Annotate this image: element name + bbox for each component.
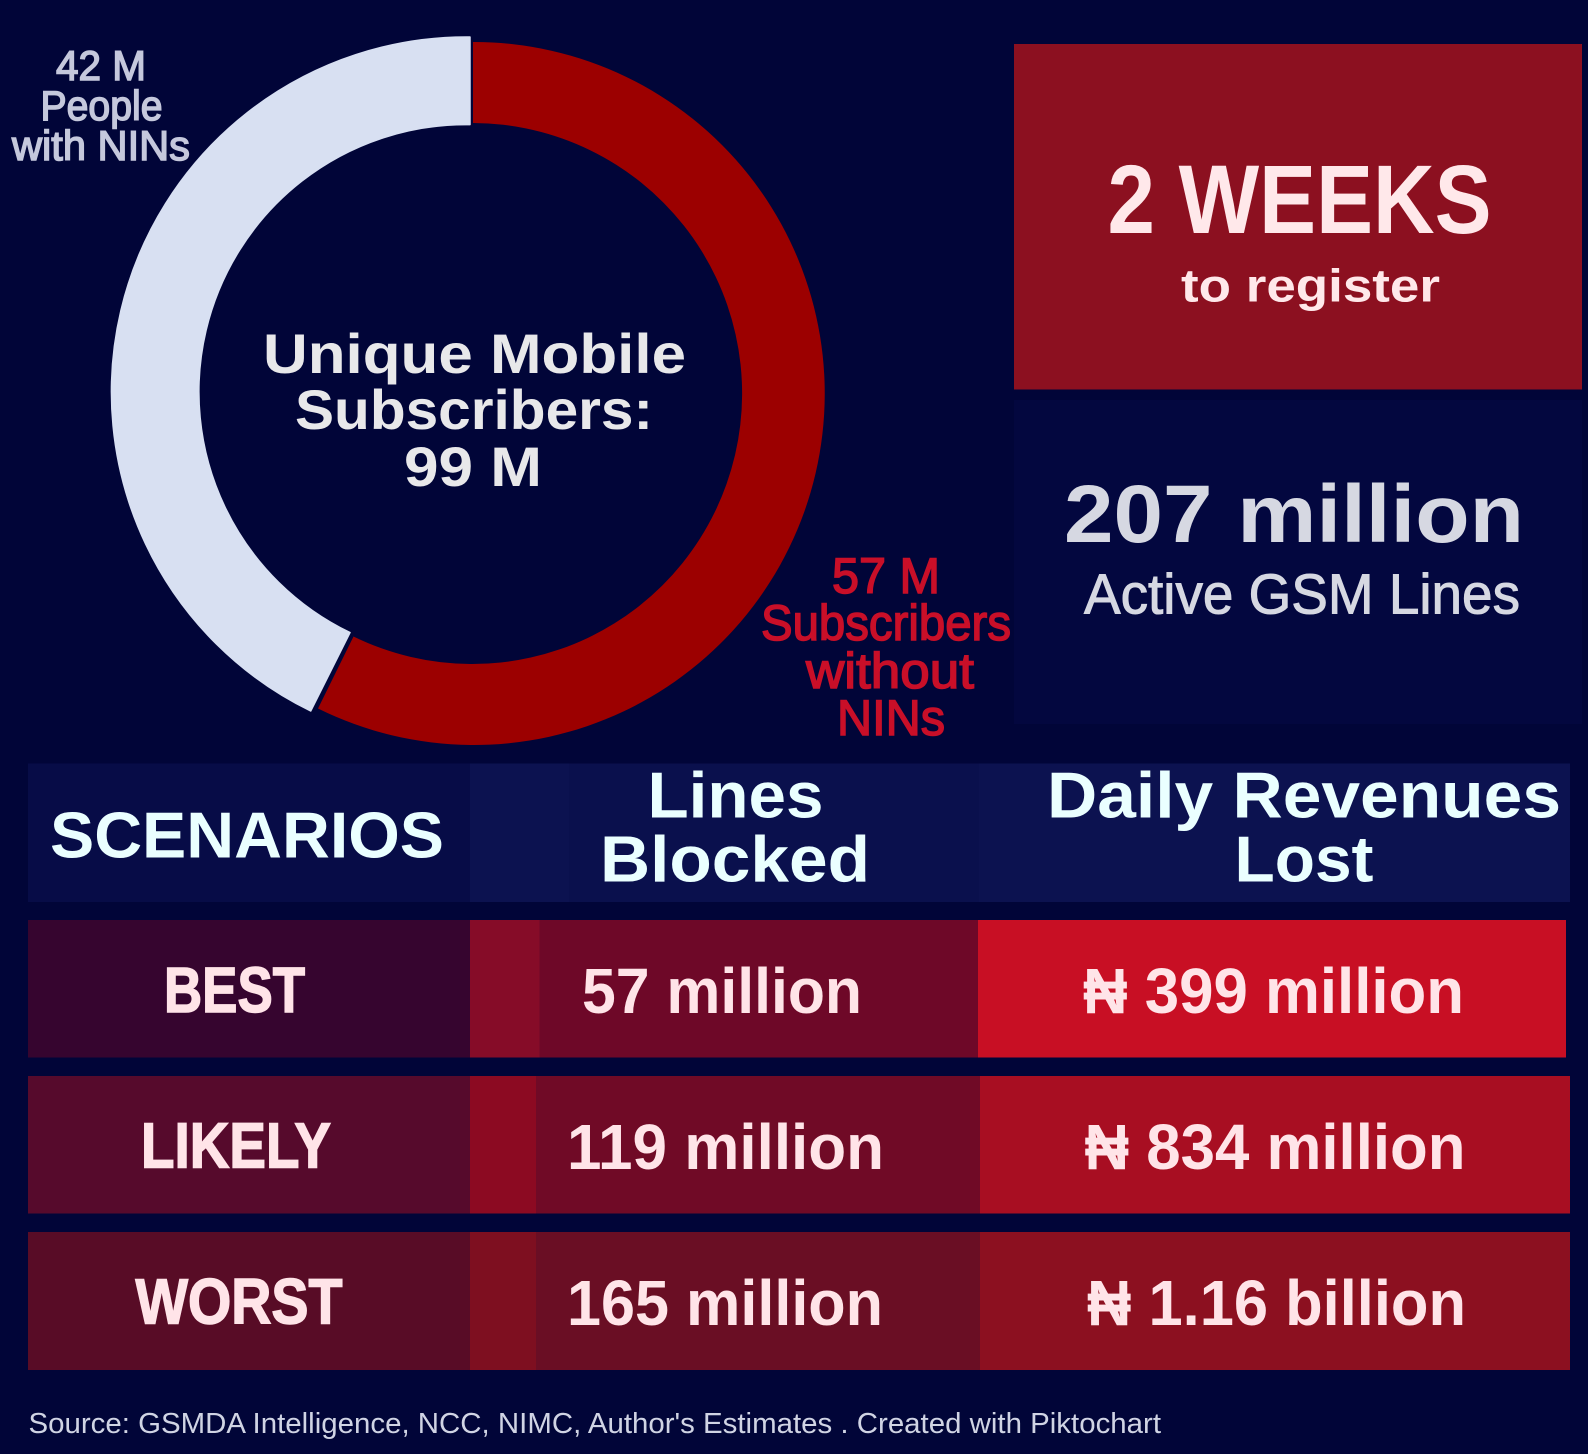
table row: best bbox=[28, 920, 1566, 1058]
column heading: lines blocked: Blocked bbox=[600, 822, 870, 896]
lines blocked: 57 million: 57 million bbox=[582, 955, 862, 1027]
column heading: daily revenues lost bbox=[1047, 758, 1561, 896]
scenario: best: BEST bbox=[164, 954, 305, 1026]
source note: Source: GSMDA Intelligence, NCC, NIMC, Author's Estimates . Created with Piktochart bbox=[28, 1408, 1161, 1440]
label: 57 M subscribers without NINs: Subscribers bbox=[761, 595, 1011, 651]
donut centre label bbox=[263, 322, 686, 498]
table header row bbox=[28, 758, 1570, 902]
column heading: daily revenues lost: Lost bbox=[1234, 822, 1374, 896]
lines blocked: 119 million: 119 million bbox=[567, 1111, 884, 1183]
table row: likely bbox=[28, 1076, 1570, 1214]
column heading: lines blocked: Lines bbox=[648, 758, 824, 832]
label: 57 M subscribers without NINs: NINs bbox=[837, 690, 945, 746]
label: 42 M people with NINs: People bbox=[40, 82, 162, 129]
revenue lost: 1.16 billion: ₦ 1.16 billion bbox=[1087, 1267, 1466, 1339]
lines blocked: 165 million: 165 million bbox=[567, 1267, 883, 1339]
donut centre label: 99 M bbox=[404, 435, 542, 498]
column heading: lines blocked bbox=[600, 758, 870, 896]
caption: to register: to register bbox=[1181, 260, 1440, 312]
scenario: worst: WORST bbox=[136, 1266, 342, 1338]
column heading: daily revenues lost: Daily Revenues bbox=[1047, 758, 1561, 832]
table row: worst bbox=[28, 1232, 1570, 1370]
label: 42 M people with NINs: 42 M bbox=[56, 42, 146, 89]
stat: 207 million: 207 million bbox=[1064, 469, 1524, 560]
donut chart: unique mobile subscribers bbox=[111, 37, 825, 745]
column heading: scenarios: SCENARIOS bbox=[50, 798, 444, 872]
label: 42 M people with NINs bbox=[11, 42, 190, 169]
panel: 2 weeks to register bbox=[1014, 44, 1582, 390]
revenue lost: 834 million: ₦ 834 million bbox=[1084, 1111, 1466, 1183]
stat: 2 weeks: 2 WEEKS bbox=[1108, 145, 1492, 254]
label: 42 M people with NINs: with NINs bbox=[11, 122, 190, 169]
label: 57 M subscribers without NINs: without bbox=[805, 643, 974, 699]
label: 57 M subscribers without NINs bbox=[761, 548, 1011, 746]
caption: active GSM lines: Active GSM Lines bbox=[1084, 562, 1520, 626]
segment: subscribers without NINs bbox=[318, 42, 825, 745]
scenario: likely: LIKELY bbox=[141, 1110, 331, 1182]
label: 57 M subscribers without NINs: 57 M bbox=[832, 548, 940, 604]
segment: people with NINs bbox=[111, 37, 470, 711]
revenue lost: 399 million: ₦ 399 million bbox=[1083, 955, 1464, 1027]
donut centre label: Unique Mobile bbox=[263, 322, 686, 385]
panel: 207 million active GSM lines bbox=[1014, 400, 1582, 724]
donut centre label: Subscribers: bbox=[295, 378, 653, 441]
